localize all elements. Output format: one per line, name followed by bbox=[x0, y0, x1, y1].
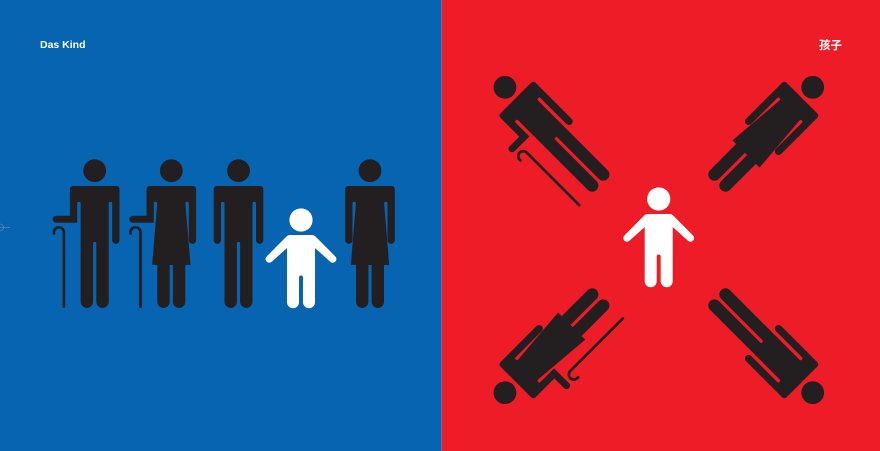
icon: man, bottom right bbox=[698, 278, 838, 418]
icon: woman, top right bbox=[698, 62, 838, 202]
icon: white child, centre bbox=[623, 187, 694, 287]
group: blue panel family row bbox=[53, 159, 395, 308]
icon: father bbox=[214, 159, 263, 308]
icon: grandfather with cane bbox=[53, 159, 119, 308]
panel: blue background bbox=[0, 0, 441, 451]
icon: mother bbox=[345, 159, 395, 308]
icon: grandmother with cane, bottom left bbox=[479, 278, 632, 430]
icon: grandmother with cane bbox=[129, 159, 196, 308]
panel: red background bbox=[442, 0, 880, 451]
heading: 孩子: 孩子 bbox=[819, 38, 842, 52]
group: red panel figures surrounding child bbox=[467, 62, 838, 430]
icon: white child bbox=[266, 208, 336, 308]
icon: grandfather with cane, top left bbox=[467, 62, 620, 214]
heading: Das Kind: Das Kind bbox=[40, 39, 86, 51]
